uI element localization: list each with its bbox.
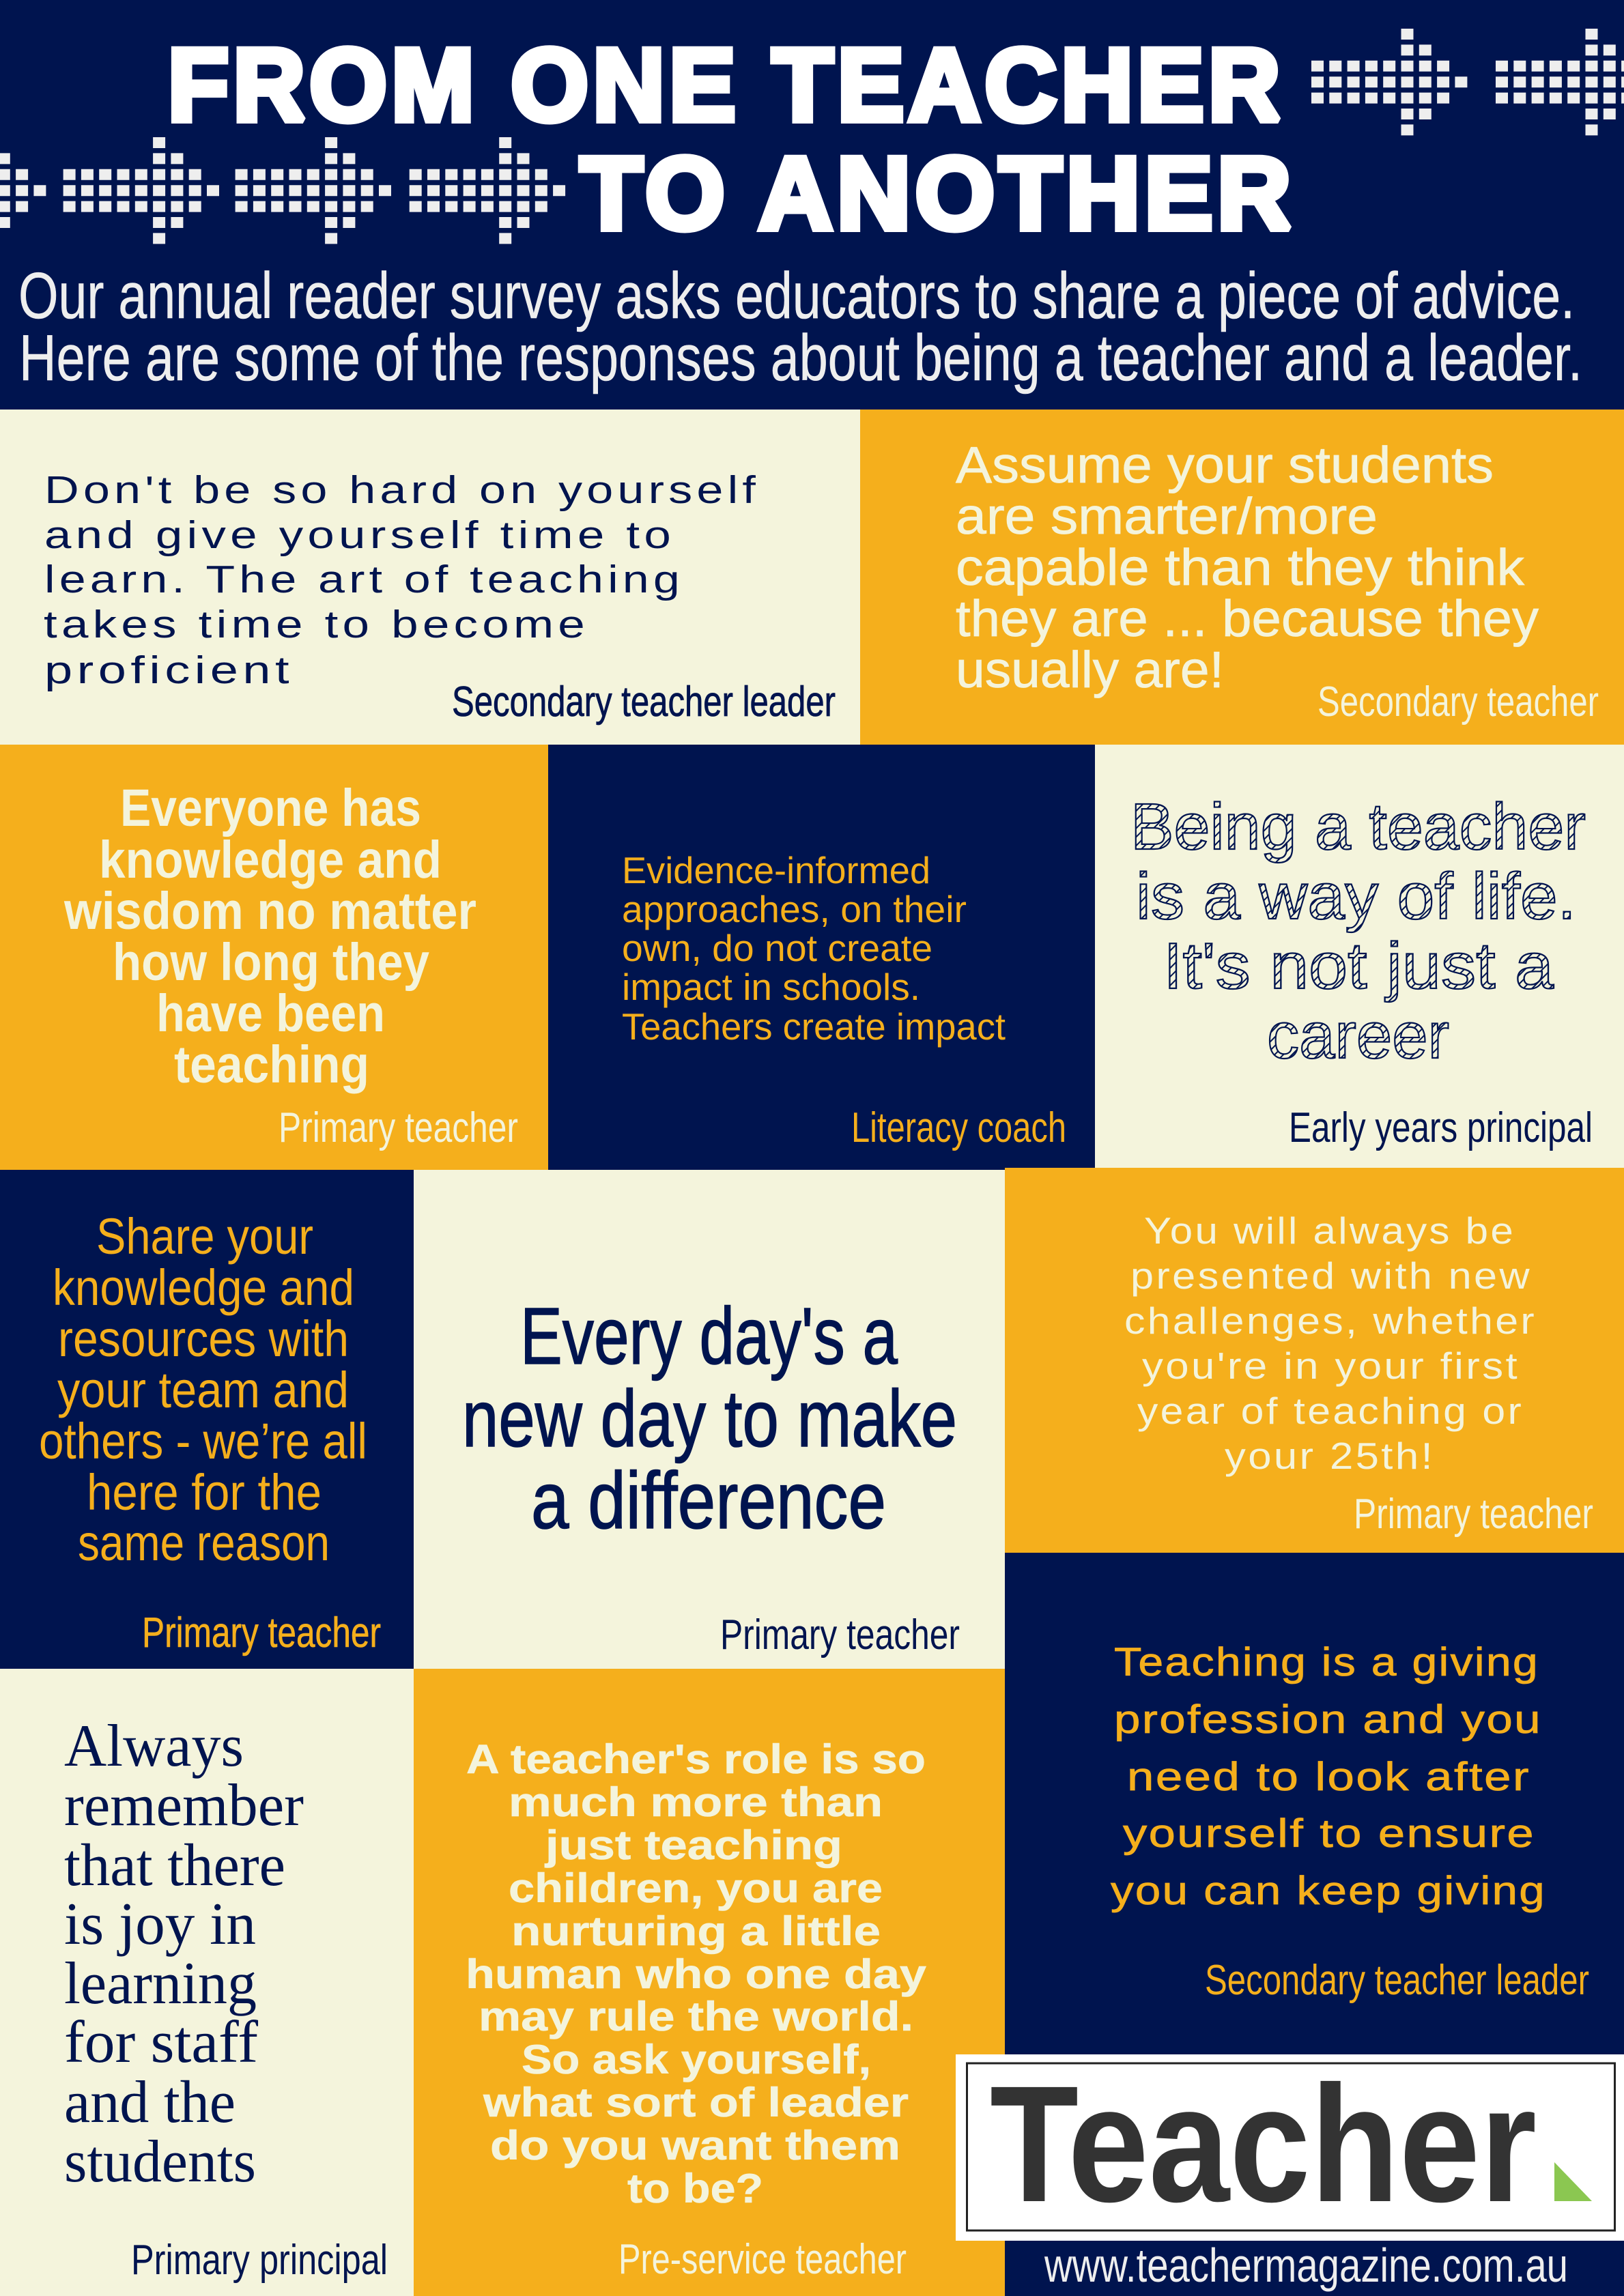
quote: that there — [64, 1833, 285, 1899]
attribution: Secondary teacher leader — [452, 678, 836, 726]
quote: are smarter/more — [956, 487, 1378, 545]
panel: being a teacher is a way of life — [1095, 745, 1624, 1168]
quote: new day to make — [462, 1374, 957, 1464]
quote — [39, 1208, 367, 1571]
panel: assume your students — [860, 410, 1624, 745]
quote: year of teaching or — [1137, 1390, 1524, 1432]
quote — [1130, 790, 1586, 1072]
quote: wisdom no matter — [63, 882, 476, 941]
attribution: Pre-service teacher — [618, 2236, 907, 2283]
panel: everyone has knowledge — [0, 745, 548, 1170]
quote: Every day's a — [520, 1291, 898, 1381]
quote: others - we’re all — [39, 1413, 367, 1469]
quote: how long they — [113, 933, 429, 992]
quote: your 25th! — [1225, 1435, 1435, 1477]
quote: to be? — [627, 2166, 763, 2211]
panel: you will always be presented — [1005, 1168, 1624, 1553]
quote: and the — [64, 2069, 236, 2136]
quote: career — [1267, 999, 1449, 1072]
quote — [64, 1713, 304, 2195]
quote: It's not just a — [1163, 930, 1554, 1003]
title: TO ANOTHER — [580, 136, 1296, 250]
icon: dotted arrows, top row — [1311, 29, 1624, 135]
panel: header — [0, 0, 1624, 410]
quote — [63, 779, 476, 1094]
quote: do you want them — [490, 2123, 900, 2168]
quote: yourself to ensure — [1123, 1811, 1535, 1856]
quote: here for the — [87, 1464, 322, 1521]
quote: you can keep giving — [1111, 1869, 1546, 1913]
attribution: Primary teacher — [142, 1609, 381, 1656]
quote: need to look after — [1127, 1755, 1530, 1799]
quote: learn. The art of teaching — [44, 558, 684, 601]
attribution: Primary teacher — [720, 1611, 960, 1659]
quote: A teacher's role is so — [466, 1736, 926, 1782]
quote: presented with new — [1130, 1254, 1532, 1297]
quote: may rule the world. — [479, 1994, 913, 2039]
quote: knowledge and — [99, 831, 442, 889]
panel: always remember joy in learning — [0, 1669, 414, 2296]
quote — [956, 436, 1539, 698]
quote: human who one day — [466, 1951, 927, 1997]
quote: takes time to become — [44, 603, 589, 646]
quote: you're in your first — [1142, 1345, 1520, 1387]
title: FROM ONE TEACHER — [168, 27, 1285, 142]
quote: challenges, whether — [1124, 1300, 1537, 1342]
quote: approaches, on their — [622, 888, 967, 930]
quote — [462, 1291, 957, 1546]
quote: Teachers create impact — [622, 1005, 1006, 1048]
quote — [1124, 1209, 1537, 1477]
panel: a teacher's role — [414, 1669, 1005, 2296]
quote: nurturing a little — [511, 1908, 881, 1954]
quote: much more than — [509, 1779, 883, 1825]
quote: You will always be — [1144, 1209, 1515, 1252]
quote: Evidence-informed — [622, 849, 930, 891]
quote: So ask yourself, — [522, 2037, 871, 2082]
quote: Teaching is a giving — [1114, 1640, 1539, 1684]
attribution: Literacy coach — [851, 1104, 1066, 1151]
icon: dotted arrows, second row — [0, 137, 565, 244]
quote: for staff — [64, 2009, 259, 2076]
quote: profession and you — [1114, 1697, 1542, 1742]
quote — [622, 849, 1006, 1048]
attribution: Primary principal — [131, 2237, 388, 2284]
quote: impact in schools. — [622, 966, 920, 1008]
quote: usually are! — [956, 641, 1224, 698]
quote: what sort of leader — [483, 2080, 909, 2125]
quote: your team and — [57, 1362, 349, 1418]
quote: proficient — [44, 648, 294, 692]
title — [168, 27, 1296, 250]
quote: is a way of life. — [1136, 860, 1576, 933]
quote: they are ... because they — [956, 590, 1539, 647]
quote: Don't be so hard on yourself — [44, 468, 760, 512]
quote — [466, 1736, 927, 2211]
quote: Everyone has — [120, 779, 421, 837]
panel: teaching is a giving profession — [1005, 1553, 1624, 2296]
panel: every day's a new day — [414, 1170, 1005, 1669]
quote: have been — [156, 984, 385, 1043]
quote — [44, 468, 760, 692]
quote: is joy in — [64, 1891, 256, 1957]
quote: students — [64, 2129, 256, 2195]
quote: a difference — [531, 1456, 886, 1546]
panel: share your knowledge — [0, 1170, 414, 1669]
quote: resources with — [58, 1310, 349, 1367]
panel: evidence-informed approaches — [548, 745, 1095, 1170]
quote: capable than they think — [956, 539, 1525, 596]
quote: remember — [64, 1773, 304, 1839]
quote: Assume your students — [956, 436, 1494, 493]
quote — [1111, 1640, 1546, 1913]
quote: teaching — [174, 1035, 369, 1094]
quote: Always — [64, 1713, 244, 1779]
quote: learning — [64, 1951, 257, 2017]
intro text — [18, 259, 1582, 394]
quote: Share your — [96, 1208, 313, 1265]
quote: knowledge and — [53, 1259, 354, 1316]
quote: own, do not create — [622, 927, 932, 969]
attribution: Primary teacher — [279, 1104, 518, 1151]
logo: Teacher magazine: Teacher — [990, 2052, 1537, 2237]
quote: Being a teacher — [1130, 790, 1586, 863]
panel: don't be so hard on yourself — [0, 410, 860, 745]
quote: just teaching — [545, 1822, 842, 1868]
quote: and give yourself time to — [44, 513, 675, 557]
quote: children, you are — [509, 1865, 883, 1911]
quote: same reason — [78, 1515, 330, 1571]
